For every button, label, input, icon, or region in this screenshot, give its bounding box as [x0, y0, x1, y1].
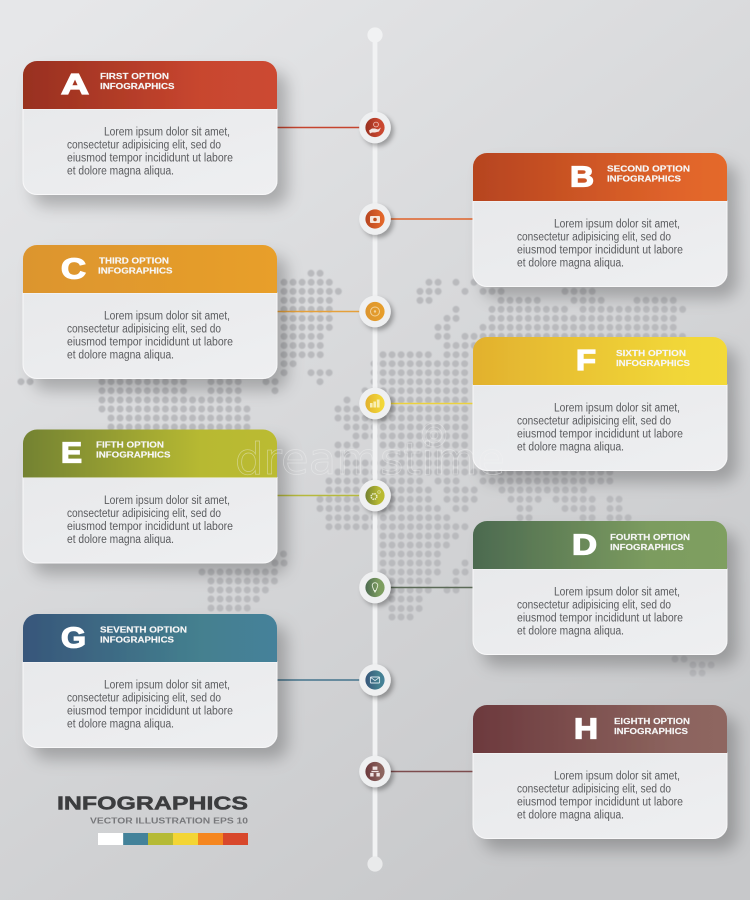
panel: A first option: eiusmod tempor incididunt ut labore	[67, 152, 233, 164]
panel: A first option: et dolore magna aliqua.	[67, 166, 174, 178]
node A: hand icon	[359, 112, 391, 143]
panel: B second option: consectetur adipisicing elit, sed do	[517, 232, 671, 244]
panel: B second option: SECOND OPTION	[607, 165, 690, 174]
panel: D fourth option: D	[572, 529, 597, 561]
panel: H eighth option: H	[574, 713, 598, 745]
panel: F sixth option: consectetur adipisicing elit, sed do	[517, 416, 671, 428]
panel: C third option: C	[61, 253, 86, 285]
panel: E fifth option: et dolore magna aliqua.	[67, 534, 174, 546]
panel: C third option: eiusmod tempor incididunt ut labore	[67, 336, 233, 348]
panel: A first option: Lorem ipsum dolor sit amet,	[104, 126, 230, 138]
panel: F sixth option	[473, 337, 727, 470]
panel: H eighth option	[473, 705, 727, 838]
panel: F sixth option: Lorem ipsum dolor sit amet,	[554, 402, 680, 414]
panel: G seventh option: Lorem ipsum dolor sit amet,	[104, 680, 230, 692]
panel: D fourth option: INFOGRAPHICS	[610, 543, 685, 552]
panel: D fourth option: Lorem ipsum dolor sit amet,	[554, 586, 680, 598]
panel: F sixth option: et dolore magna aliqua.	[517, 442, 624, 454]
panel: F sixth option: INFOGRAPHICS	[616, 359, 691, 368]
panel: B second option: et dolore magna aliqua.	[517, 258, 624, 270]
panel: E fifth option: Lorem ipsum dolor sit amet,	[104, 495, 230, 507]
panel: H eighth option: consectetur adipisicing elit, sed do	[517, 784, 671, 796]
panel: A first option: FIRST OPTION	[100, 72, 169, 81]
panel: D fourth option: consectetur adipisicing elit, sed do	[517, 600, 671, 612]
panel: E fifth option: FIFTH OPTION	[96, 441, 164, 450]
panel: G seventh option: SEVENTH OPTION	[100, 626, 187, 634]
panel: E fifth option: INFOGRAPHICS	[96, 451, 171, 460]
panel: E fifth option: E	[61, 438, 82, 470]
panel: G seventh option	[23, 614, 277, 748]
panel: C third option: THIRD OPTION	[99, 256, 169, 265]
panel: A first option	[23, 61, 277, 194]
dotted world map	[21, 273, 711, 673]
node D: light bulb icon	[359, 572, 391, 603]
panel: C third option: INFOGRAPHICS	[98, 266, 173, 275]
subheading: VECTOR ILLUSTRATION EPS 10	[90, 817, 249, 826]
node H: network icon	[359, 756, 391, 787]
panel: A first option: A	[61, 69, 89, 101]
panel: H eighth option: Lorem ipsum dolor sit amet,	[554, 770, 680, 782]
panel: D fourth option	[473, 521, 727, 654]
vertical timeline	[367, 27, 383, 872]
panel: F sixth option: SIXTH OPTION	[616, 349, 686, 358]
panel: B second option	[473, 153, 727, 286]
panel: E fifth option	[23, 430, 277, 563]
heading: INFOGRAPHICS	[57, 794, 248, 814]
panel: E fifth option: consectetur adipisicing elit, sed do	[67, 508, 221, 520]
panel: F sixth option: eiusmod tempor incididunt ut labore	[517, 428, 683, 440]
panel: C third option	[23, 245, 277, 378]
watermark: dreamstime	[235, 434, 505, 485]
node B: camera icon	[359, 203, 391, 235]
panel: B second option: B	[570, 161, 594, 193]
panel: B second option: eiusmod tempor incididunt ut labore	[517, 244, 683, 256]
panel: F sixth option: F	[576, 345, 596, 377]
panel: H eighth option: INFOGRAPHICS	[614, 727, 689, 736]
panel: G seventh option: et dolore magna aliqua.	[67, 718, 174, 730]
node G: envelope icon	[359, 664, 391, 696]
colour bar	[98, 833, 248, 845]
panel: C third option: consectetur adipisicing elit, sed do	[67, 324, 221, 336]
panel: G seventh option: eiusmod tempor incididunt ut labore	[67, 706, 233, 718]
panel: E fifth option: eiusmod tempor incididunt ut labore	[67, 521, 233, 533]
panel: C third option: et dolore magna aliqua.	[67, 350, 174, 362]
panel: D fourth option: eiusmod tempor incididunt ut labore	[517, 612, 683, 624]
panel: B second option: INFOGRAPHICS	[607, 175, 682, 184]
panel: A first option: INFOGRAPHICS	[100, 82, 175, 91]
panel: G seventh option: G	[61, 622, 86, 654]
panel: A first option: consectetur adipisicing elit, sed do	[67, 140, 221, 152]
title block	[57, 794, 249, 845]
panel: D fourth option: FOURTH OPTION	[610, 533, 690, 542]
panel: C third option: Lorem ipsum dolor sit amet,	[104, 310, 230, 322]
node F: bar chart icon	[359, 388, 391, 419]
panel: B second option: Lorem ipsum dolor sit amet,	[554, 218, 680, 230]
connector lines	[277, 128, 473, 772]
panel: H eighth option: EIGHTH OPTION	[614, 717, 690, 726]
panel: D fourth option: et dolore magna aliqua.	[517, 626, 624, 638]
panel: H eighth option: eiusmod tempor incididunt ut labore	[517, 796, 683, 808]
node E: gear icon	[359, 480, 391, 511]
panel: H eighth option: et dolore magna aliqua.	[517, 810, 624, 822]
panel: G seventh option: consectetur adipisicing elit, sed do	[67, 692, 221, 704]
panel: G seventh option: INFOGRAPHICS	[100, 636, 175, 644]
node C: ring icon	[359, 296, 391, 327]
